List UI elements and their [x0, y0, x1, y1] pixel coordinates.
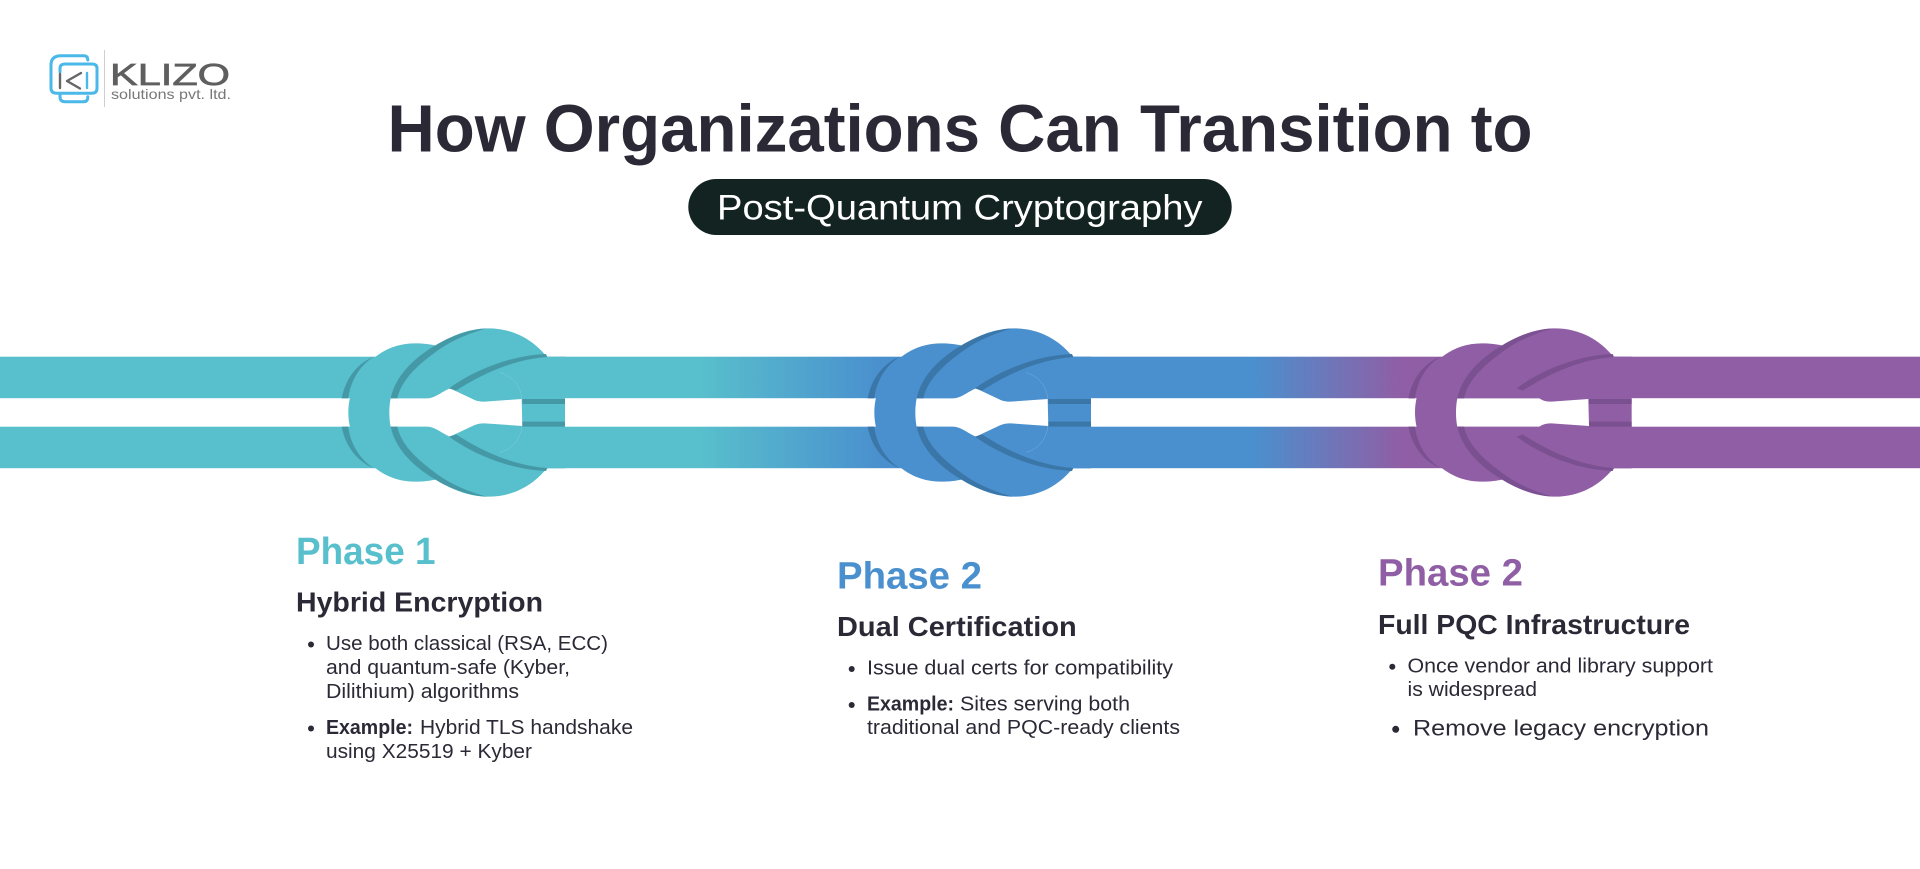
phase 1 bullet 1: and quantum-safe (Kyber,	[326, 657, 570, 679]
phase 2 bullet 2: Example:	[867, 694, 954, 716]
logo wordmark: KLIZO	[110, 57, 230, 92]
panel: phase 1	[296, 531, 633, 763]
connected rope bands	[0, 357, 1920, 468]
logo tagline: solutions pvt. ltd.	[111, 86, 231, 102]
phase 3 bullet 1: Once vendor and library support	[1408, 655, 1713, 677]
phase 2 bullet 2: Sites serving both	[960, 694, 1130, 716]
phase 1 bullet 1	[308, 633, 608, 703]
knot 1 teal	[342, 328, 565, 497]
subtitle pill	[688, 179, 1232, 235]
phase 1 heading: Phase 1	[296, 531, 436, 573]
knot 2 blue	[868, 328, 1091, 497]
phase 2 heading: Phase 2	[837, 555, 982, 597]
title: How Organizations Can Transition to	[388, 92, 1532, 167]
icon: logo mark	[51, 56, 97, 102]
panel: phase 2	[837, 555, 1180, 739]
phase 2 subheading: Dual Certification	[837, 611, 1077, 642]
logo divider	[104, 50, 105, 107]
phase 2 bullet 1: Issue dual certs for compatibility	[867, 657, 1173, 679]
knot 3 purple	[1408, 328, 1632, 497]
phase 3 bullet 2: Remove legacy encryption	[1413, 716, 1709, 741]
phase 1 bullet 2: Example:	[326, 717, 413, 739]
phase 3 heading: Phase 2	[1378, 553, 1523, 595]
logo	[51, 50, 231, 107]
subtitle pill: Post-Quantum Cryptography	[717, 188, 1203, 227]
panel: phase 3	[1378, 553, 1713, 741]
phase 1 bullet 2	[308, 717, 633, 763]
phase 2 bullet 2: traditional and PQC-ready clients	[867, 717, 1180, 739]
phase 3 bullet 1	[1389, 655, 1713, 701]
phase 3 subheading: Full PQC Infrastructure	[1378, 609, 1690, 640]
phase 1 bullet 2: using X25519 + Kyber	[326, 741, 532, 763]
phase 1 subheading: Hybrid Encryption	[296, 587, 543, 618]
phase 2 bullet 2	[849, 694, 1180, 739]
phase 1 bullet 1: Dilithium) algorithms	[326, 681, 519, 703]
phase 3 bullet 1: is widespread	[1408, 679, 1537, 701]
phase 1 bullet 2: Hybrid TLS handshake	[420, 717, 633, 739]
phase 1 bullet 1: Use both classical (RSA, ECC)	[326, 633, 608, 655]
